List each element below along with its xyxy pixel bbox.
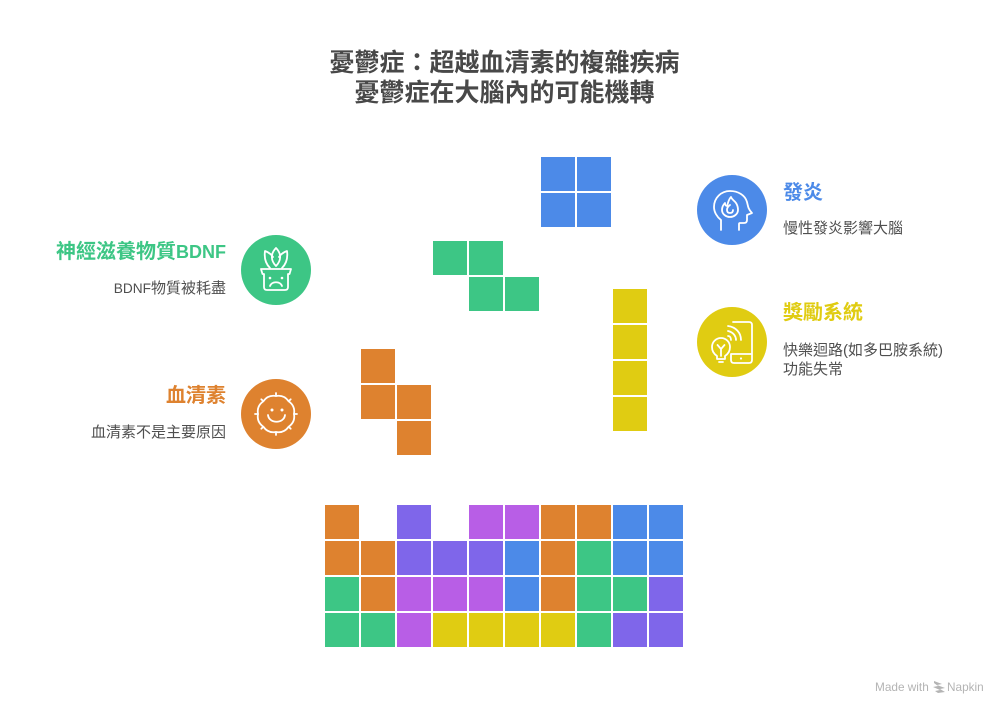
icon: head with flame (697, 175, 767, 245)
description: 血清素不是主要原因 (91, 424, 226, 441)
title: 憂鬱症在大腦內的可能機轉 (354, 79, 655, 107)
panel: reward system (697, 300, 943, 378)
watermark: Made with Napkin: Napkin (947, 680, 984, 694)
panel: BDNF (56, 235, 311, 305)
falling block: orange S (361, 349, 431, 455)
title: 憂鬱症：超越血清素的複雜疾病 (329, 49, 680, 77)
description: 慢性發炎影響大腦 (783, 219, 903, 237)
panel: serotonin (91, 379, 311, 449)
watermark: Made with Napkin: Made with (875, 680, 929, 694)
heading: 發炎 (783, 181, 823, 204)
stacked block grid (325, 505, 683, 647)
heading: 獎勵系統 (783, 300, 863, 324)
falling block: blue square (541, 157, 611, 227)
icon: sad potted plant (241, 235, 311, 305)
description: 快樂迴路(如多巴胺系統) (783, 341, 943, 359)
panel: inflammation (697, 175, 903, 245)
description: BDNF物質被耗盡 (114, 279, 226, 297)
icon: smiling sun (241, 379, 311, 449)
title (329, 49, 680, 107)
heading: 血清素 (166, 384, 226, 407)
description (783, 341, 943, 378)
description: 功能失常 (783, 361, 843, 378)
watermark: Made with Napkin (875, 680, 984, 694)
heading: 神經滋養物質BDNF (56, 240, 226, 263)
falling block: green Z (433, 241, 539, 311)
icon: phone and light bulb (697, 307, 767, 377)
falling block: yellow I (613, 289, 647, 431)
